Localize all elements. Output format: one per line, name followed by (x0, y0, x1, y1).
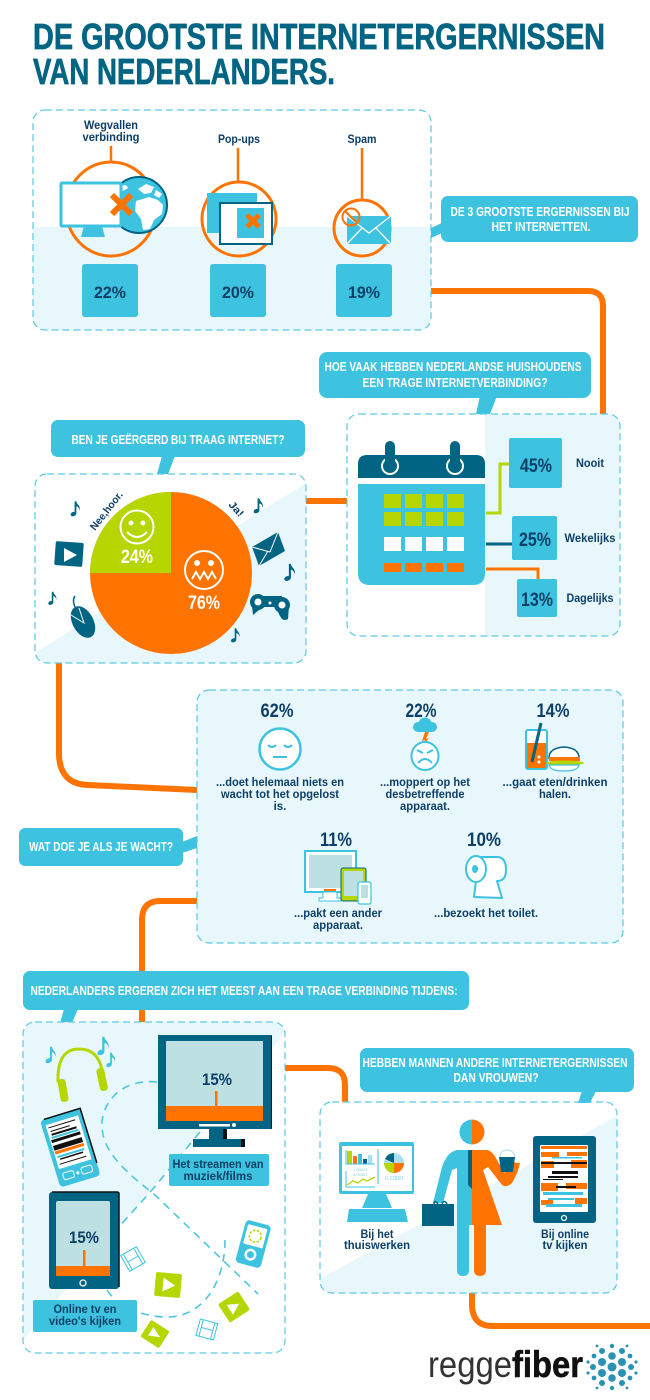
item: 62% niets doen: is. (274, 801, 286, 813)
item: spam: Spam (348, 134, 376, 146)
icon: mp3 player (235, 1219, 272, 1269)
title (33, 16, 605, 92)
label: bij online tv kijken (541, 1229, 589, 1252)
icon: monitor with charts: 4.99307 (353, 1172, 368, 1177)
item: 11% ander apparaat: apparaat. (313, 920, 363, 932)
icon: monitor with charts: 0.23850 (385, 1176, 403, 1182)
callout: hoe vaak trage verbinding: HOE VAAK HEBBEN NEDERLANDSE HUISHOUDENS (324, 359, 582, 374)
panel: trage verbinding tijdens streamen (23, 1022, 285, 1353)
logo: reggefiber: fiber (512, 1344, 583, 1385)
pie chart (90, 492, 252, 654)
item: 11% ander apparaat (294, 830, 382, 932)
item: 22% mopperen: apparaat. (400, 801, 450, 813)
label: bij online tv kijken: Bij online (541, 1229, 589, 1241)
item: 22% mopperen (380, 701, 470, 813)
label: ja: Ja! (226, 499, 246, 520)
label: bij het thuiswerken (344, 1229, 410, 1252)
item: 22% mopperen: desbetreffende (386, 789, 464, 801)
value: dagelijks 13%: Dagelijks (566, 593, 614, 605)
dashed route (102, 1082, 258, 1317)
item: 22% mopperen: 22% (406, 701, 437, 722)
title: VAN NEDERLANDERS. (33, 51, 335, 92)
panel: pie chart traag internet (35, 474, 306, 663)
callout: mannen en vrouwen: DAN VROUWEN? (454, 1070, 539, 1085)
icon: tablet 15% (49, 1192, 119, 1289)
icon: logo dots (586, 1344, 638, 1390)
icons: play buttons (140, 1272, 250, 1348)
label: bij het thuiswerken: Bij het (360, 1229, 394, 1241)
pie chart: 76% (188, 593, 220, 614)
label: online tv: video's kijken (49, 1316, 121, 1328)
icon: tablet 15%: 15% (69, 1228, 99, 1247)
item: 62% niets doen: 62% (260, 701, 294, 722)
icon: calendar (358, 441, 485, 585)
item: 62% niets doen (216, 701, 344, 813)
value: nooit 45%: Nooit (576, 458, 604, 470)
item: wegvallen verbinding: 22% (94, 283, 126, 302)
pie chart: 24% (121, 547, 153, 568)
value: dagelijks 13% (517, 579, 614, 617)
callout: nederlanders ergeren zich (23, 971, 469, 1023)
value: nooit 45%: 45% (520, 456, 552, 477)
item: pop-ups (202, 134, 276, 317)
value: nooit 45% (509, 438, 604, 488)
callout: ben je geergerd: BEN JE GEËRGERD BIJ TRAAG INTERNET? (72, 432, 285, 447)
logo: reggefiber (428, 1344, 638, 1390)
callout: mannen en vrouwen (360, 1048, 634, 1103)
icon: monitor with charts (339, 1142, 414, 1222)
label: streamen: Het streamen van (172, 1159, 264, 1171)
connectors: calendar to values (486, 464, 538, 580)
item: wegvallen verbinding: Wegvallen (84, 120, 138, 132)
item: pop-ups: Pop-ups (218, 134, 260, 146)
panel: wat doe je tijdens het wachten (197, 690, 623, 943)
item: pop-ups: 20% (222, 283, 254, 302)
value: wekelijks 25% (512, 516, 616, 560)
item: 14% eten en drinken: halen. (539, 789, 571, 801)
callout: hoe vaak trage verbinding: EEN TRAGE INTERNETVERBINDING? (362, 375, 548, 390)
label: online tv (33, 1300, 137, 1332)
label: nee, hoor: Nee,hoor. (88, 489, 126, 533)
value: dagelijks 13%: 13% (521, 590, 553, 611)
item: spam (334, 134, 392, 317)
item: wegvallen verbinding: verbinding (82, 132, 140, 144)
callout: hoe vaak trage verbinding (319, 352, 591, 414)
label: bij online tv kijken: tv kijken (542, 1240, 588, 1252)
item: 62% niets doen: wacht tot het opgelost (220, 789, 339, 801)
item: 14% eten en drinken: ...gaat eten/drinken (502, 777, 608, 789)
icon: phone (40, 1108, 101, 1188)
icons around pie (48, 498, 295, 642)
item: 62% niets doen: ...doet helemaal niets en (216, 777, 344, 789)
label: online tv: Online tv en (54, 1304, 116, 1316)
item: 10% toilet: 10% (467, 830, 501, 851)
callout: nederlanders ergeren zich: NEDERLANDERS ERGEREN ZICH HET MEEST AAN EEN TRAGE VERBINDING TIJDENS: (30, 983, 458, 998)
label: streamen (169, 1154, 269, 1186)
item: 11% ander apparaat: ...pakt een ander (294, 908, 382, 920)
icon: monitor with charts: 1.90003 (353, 1167, 368, 1172)
item: spam: 19% (348, 283, 380, 302)
icon: headphones (46, 1037, 115, 1103)
item: 14% eten en drinken (502, 701, 608, 801)
item: 14% eten en drinken: 14% (536, 701, 570, 722)
callout: de 3 grootste ergernissen (431, 196, 638, 242)
callout: de 3 grootste ergernissen: HET INTERNETTEN. (492, 219, 590, 234)
label: streamen: muziek/films (184, 1171, 252, 1183)
panel: top three annoyances (33, 110, 431, 330)
callout: wat doe je als je wacht (19, 828, 197, 866)
item: wegvallen verbinding (61, 120, 167, 317)
value: wekelijks 25%: 25% (519, 530, 551, 551)
item: 22% mopperen: ...moppert op het (380, 777, 470, 789)
label: bij het thuiswerken: thuiswerken (344, 1240, 410, 1252)
logo: reggefiber: regge (428, 1344, 512, 1385)
icon: monitor 15%: 15% (202, 1070, 232, 1089)
item: 10% toilet: ...bezoekt het toilet. (434, 908, 538, 920)
icon: half man half woman (422, 1120, 520, 1276)
panel: calendar frequency (347, 414, 620, 636)
connector lines (59, 291, 650, 1326)
callout: ben je geergerd (51, 420, 305, 474)
callout: wat doe je als je wacht: WAT DOE JE ALS JE WACHT? (29, 839, 173, 854)
icons: film strips (121, 1247, 218, 1340)
panel: mannen versus vrouwen (320, 1102, 617, 1293)
item: 11% ander apparaat: 11% (320, 830, 352, 851)
icon: tablet with noisy screen (533, 1136, 596, 1223)
value: wekelijks 25%: Wekelijks (564, 533, 616, 545)
icon: monitor 15% (158, 1035, 272, 1147)
item: 10% toilet (434, 830, 538, 920)
